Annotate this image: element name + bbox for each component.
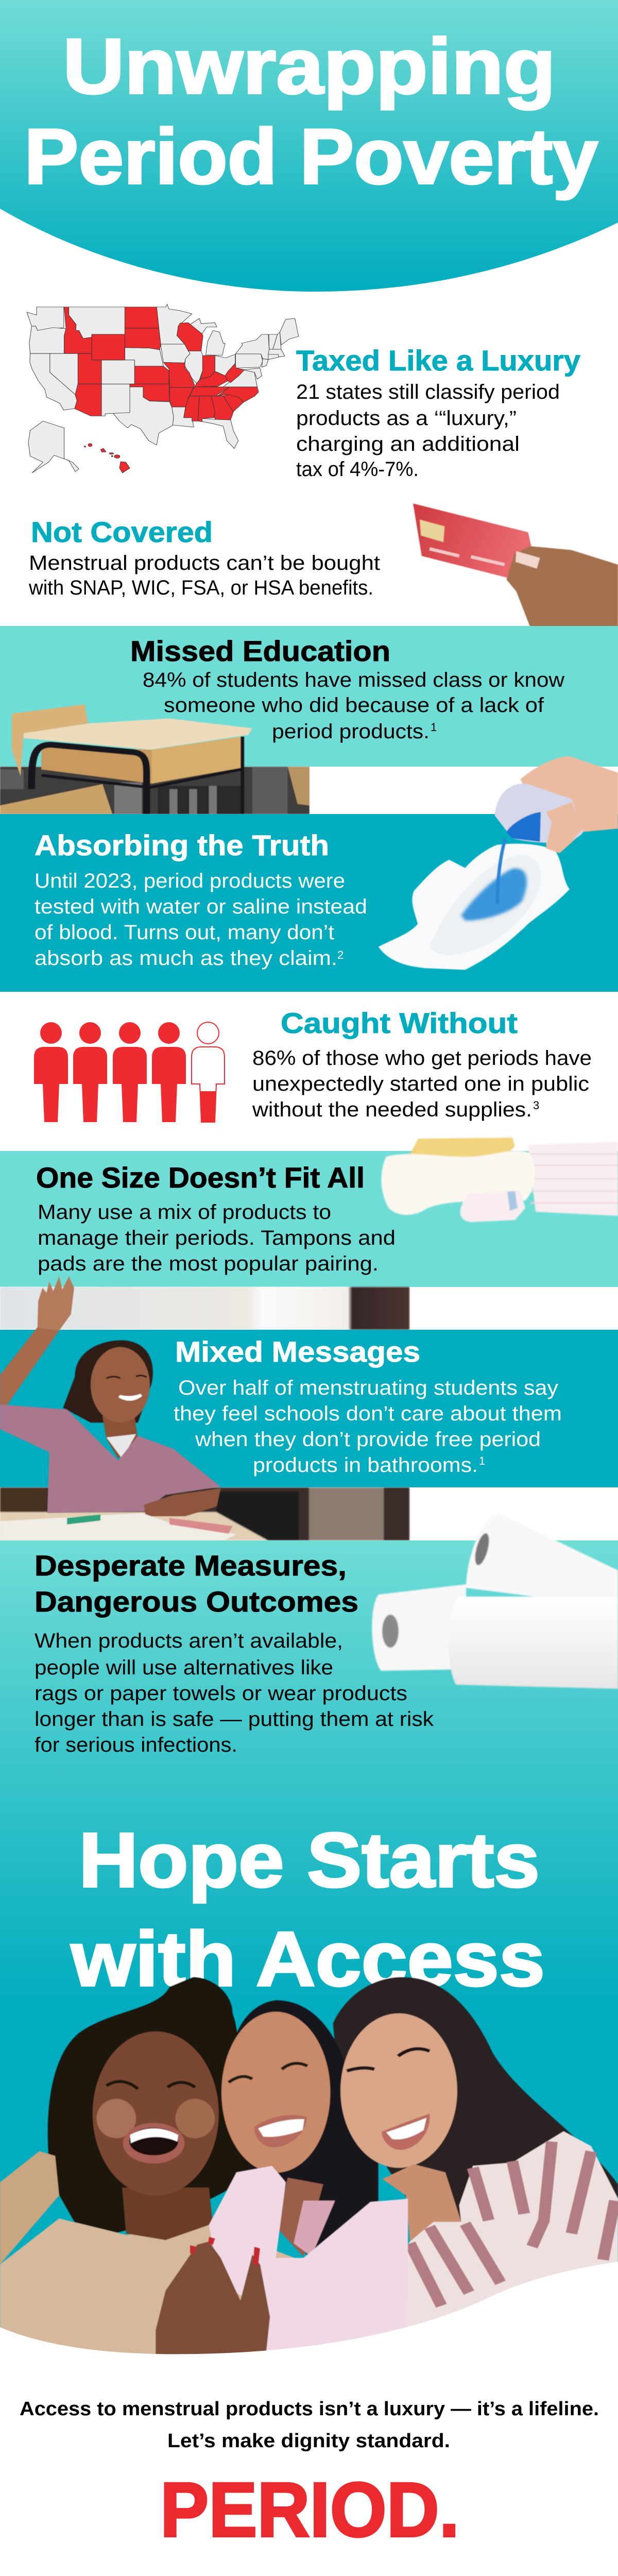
hero banner bbox=[0, 0, 618, 292]
heading: Caught Without bbox=[281, 1007, 518, 1039]
image: hand holding red credit card bbox=[413, 503, 618, 627]
body text bbox=[252, 1047, 592, 1121]
body text: 84% of students have missed class or know bbox=[143, 669, 564, 691]
text block: taxed like a luxury: products as a ‘“luxury,” bbox=[296, 407, 517, 430]
body text: longer than is safe — putting them at risk bbox=[35, 1708, 434, 1731]
body text: without the needed supplies. bbox=[252, 1098, 532, 1121]
body text: When products aren’t available, bbox=[35, 1630, 343, 1652]
band: absorbing the truth bbox=[0, 756, 618, 992]
pictogram: 4.3 of 5 people bbox=[34, 1022, 225, 1122]
title: Unwrapping bbox=[63, 23, 556, 110]
body text: products in bathrooms. bbox=[253, 1454, 478, 1477]
body text: tested with water or saline instead bbox=[35, 895, 367, 918]
logo: PERIOD.: PERIOD. bbox=[160, 2466, 459, 2553]
text block: not covered bbox=[28, 516, 380, 599]
image: paper towel rolls bbox=[372, 1513, 618, 1689]
closing statement: Access to menstrual products isn’t a luxury — it’s a lifeline. bbox=[20, 2398, 599, 2420]
body text: absorb as much as they claim. bbox=[35, 947, 337, 970]
title: hope starts with access: with Access bbox=[71, 1916, 545, 2002]
body text: when they don’t provide free period bbox=[195, 1428, 541, 1451]
band: desperate measures and closing gradient bbox=[0, 1513, 618, 2391]
body text bbox=[38, 1201, 396, 1275]
white wave mask bbox=[0, 2262, 618, 2391]
heading: One Size Doesn’t Fit All bbox=[36, 1161, 365, 1194]
body text: period products. bbox=[272, 720, 430, 743]
section: caught without bbox=[34, 1007, 592, 1122]
text block: not covered: Menstrual products can’t be bought bbox=[29, 552, 380, 574]
body text: Over half of menstruating students say bbox=[178, 1377, 558, 1399]
body text bbox=[35, 870, 367, 970]
text block: taxed like a luxury: tax of 4%-7%. bbox=[296, 458, 419, 481]
text block: not covered: with SNAP, WIC, FSA, or HSA benefits. bbox=[28, 577, 373, 599]
photo: school desk bbox=[0, 704, 310, 814]
body text: unexpectedly started one in public bbox=[252, 1073, 589, 1095]
body text: of blood. Turns out, many don’t bbox=[35, 921, 334, 944]
band: missed education bbox=[0, 626, 618, 814]
body text: 86% of those who get periods have bbox=[252, 1047, 592, 1070]
image: blue liquid poured on pad bbox=[379, 756, 618, 970]
heading: Dangerous Outcomes bbox=[35, 1585, 358, 1618]
band: mixed messages bbox=[0, 1276, 618, 1540]
heading: Desperate Measures, bbox=[35, 1549, 347, 1582]
body text bbox=[35, 1630, 434, 1756]
body text: people will use alternatives like bbox=[35, 1656, 333, 1679]
body text: 1 bbox=[431, 721, 437, 734]
body text: Until 2023, period products were bbox=[35, 870, 345, 892]
closing statement bbox=[20, 2398, 599, 2452]
title: Period Poverty bbox=[24, 113, 598, 200]
photo: three laughing young women bbox=[0, 1977, 618, 2371]
body text bbox=[143, 669, 564, 743]
title bbox=[24, 23, 598, 200]
photo: smiling student with raised hand bbox=[0, 1276, 236, 1540]
map: states taxing period products bbox=[27, 304, 299, 473]
closing statement: Let’s make dignity standard. bbox=[167, 2430, 450, 2452]
body text: 2 bbox=[337, 948, 344, 961]
text block: taxed like a luxury: charging an additional bbox=[296, 433, 520, 455]
body text: Many use a mix of products to bbox=[38, 1201, 331, 1224]
body text: they feel schools don’t care about them bbox=[174, 1402, 562, 1425]
body text: 3 bbox=[533, 1099, 539, 1112]
heading: Mixed Messages bbox=[175, 1335, 420, 1368]
title: hope starts with access bbox=[71, 1817, 545, 2002]
body text: for serious infections. bbox=[35, 1734, 237, 1756]
text block: taxed like a luxury: Taxed Like a Luxury bbox=[296, 344, 580, 377]
image: pads and tampons bbox=[381, 1138, 618, 1222]
body text: someone who did because of a lack of bbox=[164, 694, 544, 717]
text block: taxed like a luxury bbox=[296, 344, 580, 481]
title: hope starts with access: Hope Starts bbox=[79, 1817, 540, 1903]
text block: taxed like a luxury: 21 states still classify period bbox=[296, 381, 560, 403]
heading bbox=[35, 1549, 358, 1618]
body text: 1 bbox=[479, 1454, 485, 1467]
heading: Absorbing the Truth bbox=[35, 829, 329, 861]
body text: rags or paper towels or wear products bbox=[35, 1682, 407, 1705]
band: one size doesn't fit all bbox=[0, 1138, 618, 1287]
photo background: classroom bbox=[0, 1287, 409, 1540]
body text: pads are the most popular pairing. bbox=[38, 1252, 379, 1275]
heading: Missed Education bbox=[130, 635, 390, 667]
text block: not covered: Not Covered bbox=[31, 516, 213, 548]
body text: manage their periods. Tampons and bbox=[38, 1227, 396, 1249]
body text bbox=[174, 1377, 562, 1477]
